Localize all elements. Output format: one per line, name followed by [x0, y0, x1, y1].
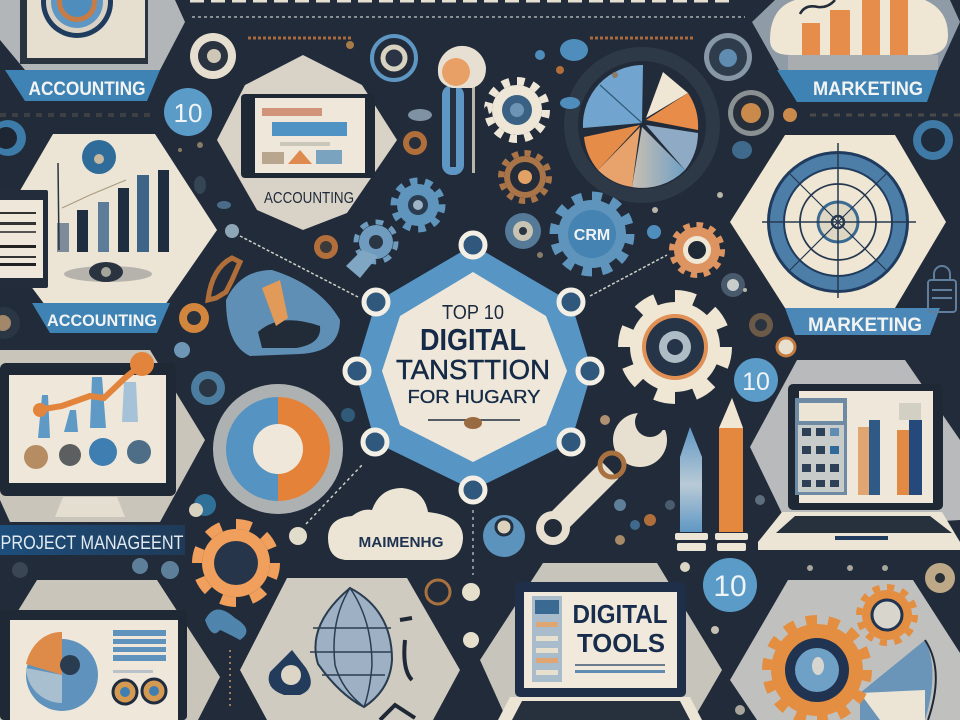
panel: digital tools laptop hexagon [480, 563, 722, 720]
banner: marketing lower [785, 308, 940, 336]
gear: CRM [554, 196, 630, 272]
banner: project management: PROJECT MANAGEENT [0, 533, 184, 554]
panel: target hexagon [730, 135, 946, 336]
cloud: label: MAIMENHG [358, 534, 444, 551]
title remnant and dashed rules [0, 1, 960, 115]
icon: bronze ring [314, 131, 427, 259]
heading: for hungary: FOR HUGARY [408, 387, 540, 407]
icon: balloon globe [310, 588, 392, 707]
icon: light bulb and tube [438, 46, 486, 175]
connector: left dashed [240, 236, 358, 297]
icon: gear wrench small [346, 222, 396, 278]
icon: blue pencil [675, 427, 708, 551]
calculator [795, 398, 847, 495]
heading: top 10: TOP 10 [442, 302, 504, 324]
icon: orange ring [179, 303, 209, 333]
badge: 10 right: 10 [742, 368, 770, 396]
panel: central octagon [345, 233, 602, 502]
heading: digital tools: TOOLS [577, 628, 665, 658]
icons: right cluster discs [704, 33, 953, 356]
icon: small cream node [289, 527, 307, 545]
badge: 10 lower [703, 558, 757, 612]
gear: orange small upper [859, 587, 915, 643]
panel: tablet accounting hexagon [217, 55, 397, 230]
panel: globe balloon hexagon [240, 578, 460, 720]
badge: 10 lower: 10 [713, 570, 747, 603]
label: accounting: ACCOUNTING [264, 190, 354, 207]
icon: dark squiggles [380, 618, 415, 720]
chart: quarter pie [860, 640, 936, 720]
bar chart: orange [800, 0, 908, 55]
panel: gears pie hexagon [730, 580, 960, 720]
chart: monitor bars and line [33, 352, 154, 438]
banner: accounting second [32, 303, 170, 333]
chart: target rings [762, 143, 916, 298]
icon: blue gear key [394, 181, 442, 229]
cloud: label [328, 488, 463, 560]
sidebar [532, 596, 562, 682]
banner: project management [0, 525, 185, 555]
badge: 10 upper left [164, 88, 212, 136]
list block [113, 630, 166, 673]
icon: padlock list [928, 266, 956, 312]
icon: wrench [536, 406, 672, 545]
icons: two rings [113, 679, 166, 704]
panel: laptop with calculator [750, 360, 960, 550]
nodes: ring connectors [345, 233, 602, 502]
icon: bronze scribble [208, 258, 240, 300]
bar chart [57, 163, 169, 252]
gear: orange [197, 524, 275, 602]
icon: small blue blobs [174, 39, 752, 358]
icon: blue swirl [205, 609, 246, 640]
bars: laptop chart [858, 403, 922, 495]
banner: accounting second: ACCOUNTING [47, 311, 157, 330]
icon: brown disc lower right [925, 563, 955, 593]
icon: orange pencil [715, 398, 748, 551]
banner: marketing upper [777, 70, 938, 102]
document [0, 190, 48, 288]
icon: small nodes [426, 562, 690, 648]
badge: 10 right [734, 358, 778, 402]
divider with small icon [428, 417, 520, 429]
heading: digital tools [572, 599, 668, 658]
icon: blue small dots [189, 408, 355, 517]
icon: ring top left [190, 33, 236, 79]
banner: marketing lower: MARKETING [808, 315, 922, 336]
chart: pie [26, 632, 98, 711]
banner: marketing upper: MARKETING [813, 79, 923, 100]
gear: CRM: CRM [574, 227, 610, 244]
gear: white small [488, 81, 546, 139]
icon: eye smudge [64, 262, 152, 282]
gear: big cream [625, 297, 725, 397]
badge: 10 upper left: 10 [174, 98, 202, 128]
icon: blue tangled blob [226, 270, 340, 356]
panel: top-left accounting hexagon [0, 0, 185, 101]
icon: disc near donut [191, 371, 225, 405]
banner: accounting: ACCOUNTING [28, 79, 146, 100]
heading: digital tools: DIGITAL [572, 599, 668, 629]
chart: donut [213, 384, 343, 514]
icon: small disc [721, 273, 745, 297]
panel: bar chart accounting hexagon [0, 134, 217, 333]
panel: top-right marketing hexagon [752, 0, 960, 102]
icon: blue blob with dot [483, 515, 525, 557]
panel: monitor project management [0, 350, 205, 555]
connector: right dashed [590, 255, 667, 296]
chart: pie in dark ring [564, 47, 720, 203]
gear: orange small [672, 225, 722, 275]
icon: blue ring [372, 36, 416, 80]
connector: lower-left dotted [306, 465, 362, 524]
panel: lower-left monitor with pie [0, 580, 220, 720]
gear: brown [501, 153, 549, 201]
icons: left edge discs [0, 120, 26, 339]
gear: orange big [767, 620, 867, 720]
heading: transformation: TANSTTION [396, 354, 550, 385]
dotted verticals [230, 510, 473, 710]
icon: eye drop [269, 650, 311, 695]
icons: row of discs [24, 438, 151, 469]
icon: disc left of CRM [505, 213, 541, 249]
banner: accounting [5, 70, 160, 101]
heading: digital: DIGITAL [420, 322, 526, 357]
icon: badge above chart [82, 140, 116, 174]
